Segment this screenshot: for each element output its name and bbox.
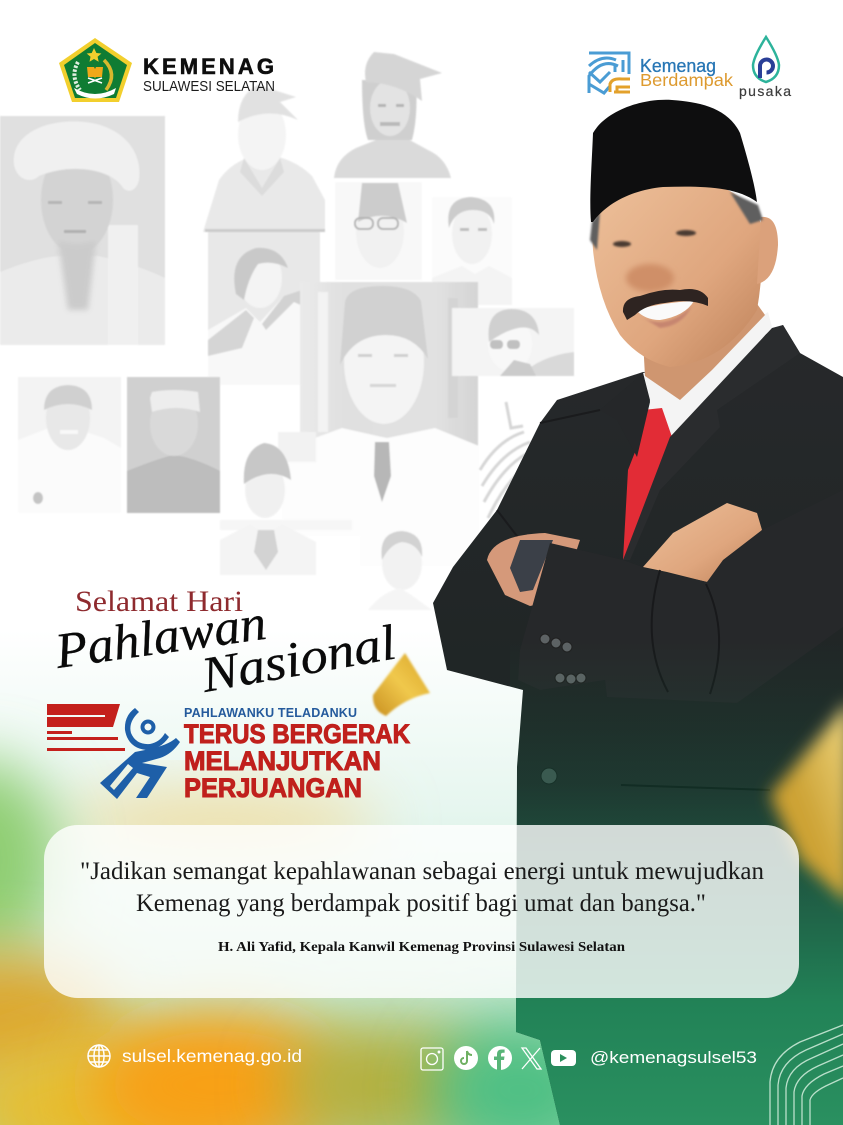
eyes: [613, 230, 696, 247]
pocket seam: [621, 785, 770, 790]
SULAWESI SELATAN: SULAWESI SELATAN: [143, 79, 275, 95]
KEMENAG: KEMENAG: [143, 54, 274, 79]
portrait: man with glasses, hand on chin: [452, 308, 574, 376]
logo: Kemenag emblem: [59, 38, 132, 102]
suit torso: [433, 325, 843, 1125]
shirt collar: [643, 312, 772, 470]
MELANJUTKAN: MELANJUTKAN: [184, 746, 381, 776]
emblem: striped flag: [480, 402, 530, 530]
red wing: [47, 704, 125, 751]
left lapel: [600, 373, 650, 457]
gold blurred corner shape: [770, 700, 843, 905]
portrait: elder in dark jacket: [127, 377, 220, 513]
footer: [88, 1025, 843, 1125]
runner figure: [100, 708, 180, 799]
Selamat Hari: Selamat Hari: [75, 585, 243, 618]
logo: Kemenag Berdampak: [589, 53, 733, 93]
jacket button: [541, 768, 557, 784]
icon: tiktok: [454, 1046, 478, 1070]
right lapel: [623, 325, 800, 560]
nose: [626, 264, 674, 292]
Berdampak: Berdampak: [640, 70, 733, 90]
portrait: young soldier: [220, 432, 352, 575]
portrait: Sukarno with peci: [282, 282, 479, 566]
face: [593, 179, 762, 367]
side hair: [590, 192, 763, 250]
ear: [757, 217, 778, 284]
portrait: heroine with hair bun: [208, 232, 320, 385]
quote text: Kemenag yang berdampak positif bagi umat dan bangsa.": [136, 890, 706, 917]
theme logo: Hari Pahlawan: [47, 704, 410, 803]
icon: youtube: [551, 1050, 576, 1066]
quote text: "Jadikan semangat kepahlawanan sebagai energi untuk mewujudkan: [80, 858, 764, 885]
icon: building arcs: [589, 53, 630, 93]
bottom green fade over suit: [516, 703, 843, 1125]
necktie: [623, 408, 672, 560]
peci cap: [590, 100, 757, 222]
quote panel: [44, 825, 799, 998]
portrait: man with glasses and peci: [335, 182, 422, 280]
portrait: long haired warrior: [334, 52, 451, 178]
crossed right hand: [643, 503, 762, 582]
faded hero portraits collage: [0, 52, 574, 610]
pusaka: pusaka: [739, 83, 791, 99]
logo: Pusaka: [739, 37, 791, 99]
portrait: woman: [368, 531, 432, 610]
handle: @kemenagsulsel53: [590, 1048, 757, 1067]
Kemenag: Kemenag: [640, 56, 716, 76]
lower lip: [640, 306, 692, 328]
icon: X: [522, 1048, 541, 1069]
brand text: [143, 54, 275, 95]
crossed forearm: [518, 490, 843, 703]
PAHLAWANKU TELADANKU: PAHLAWANKU TELADANKU: [184, 706, 357, 720]
portrait: traditional cap figure: [203, 85, 325, 232]
icon: drop: [753, 37, 779, 82]
smile teeth: [636, 301, 694, 320]
portrait: elder in white with cap: [18, 377, 121, 513]
website: sulsel.kemenag.go.id: [122, 1046, 302, 1066]
portrait: uniformed man: [432, 197, 512, 305]
attribution: H. Ali Yafid, Kepala Kanwil Kemenag Provinsi Sulawesi Selatan: [218, 940, 625, 955]
neck: [643, 280, 765, 400]
quote text: [80, 858, 764, 917]
wristwatch: [510, 540, 553, 592]
decorative arcs: [770, 1025, 843, 1125]
icon: instagram: [421, 1048, 443, 1070]
left hand under arm: [487, 533, 580, 606]
moustache: [623, 289, 708, 320]
far sleeve crease: [497, 410, 600, 540]
man in suit: [433, 100, 843, 1125]
cuff buttons: [540, 634, 586, 684]
portrait: turbaned elder: [0, 116, 165, 345]
heading: [51, 585, 400, 703]
TERUS BERGERAK: TERUS BERGERAK: [184, 719, 410, 749]
icon: facebook: [488, 1046, 512, 1070]
PERJUANGAN: PERJUANGAN: [184, 773, 362, 803]
gold ribbon: [373, 653, 430, 716]
Nasional: Nasional: [196, 614, 400, 703]
Pahlawan: Pahlawan: [51, 594, 269, 679]
icon: globe: [88, 1045, 110, 1067]
